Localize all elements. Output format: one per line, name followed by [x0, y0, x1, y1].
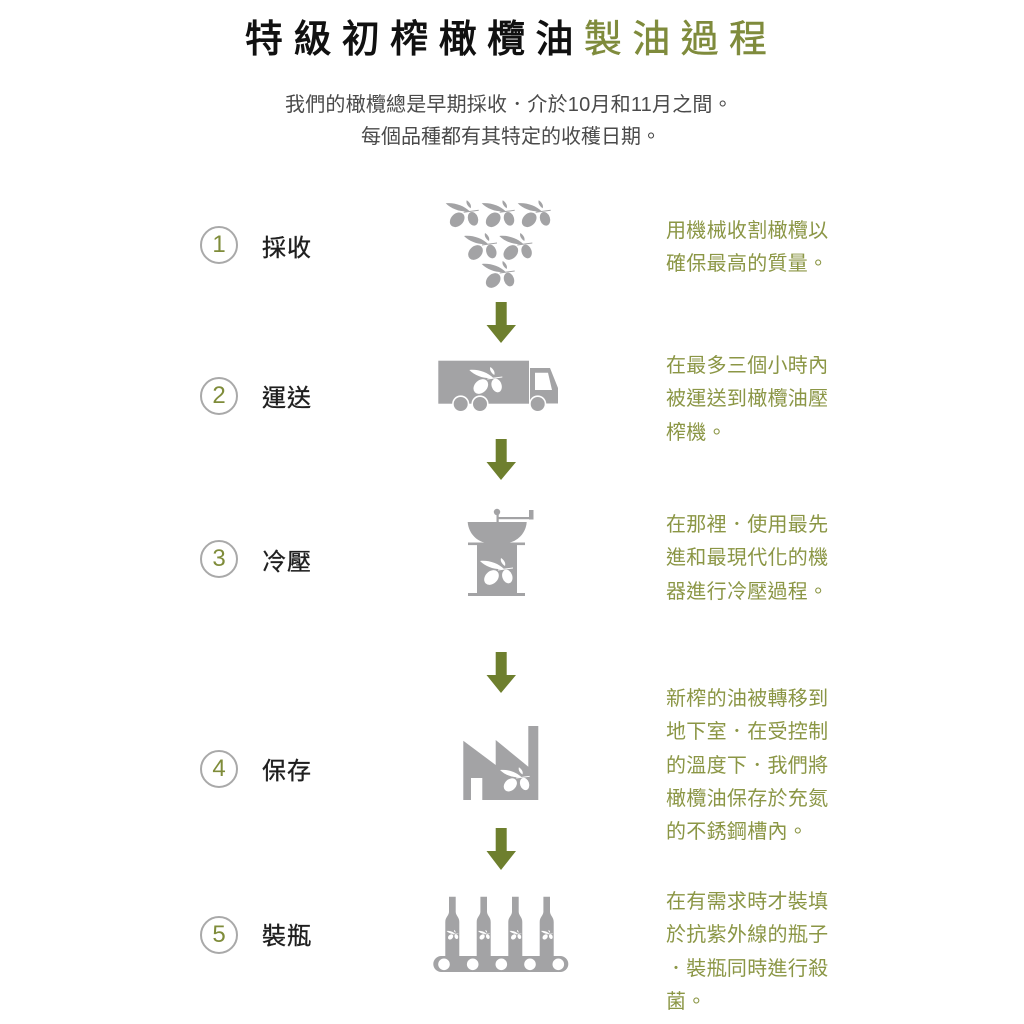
step 4 description: 橄欖油保存於充氮 [666, 788, 828, 810]
intro text line 2: 每個品種都有其特定的收穫日期。 [361, 126, 661, 148]
icon: factory [463, 726, 538, 800]
step 2 description: 榨機。 [666, 422, 727, 444]
step 4 description: 的溫度下．我們將 [666, 755, 828, 777]
step 5 description: 菌。 [666, 991, 707, 1013]
step 1 description [666, 220, 828, 275]
step 4 description: 地下室．在受控制 [666, 721, 828, 743]
step 1 label: 採收 [262, 235, 312, 262]
step 5 description: 於抗紫外線的瓶子 [666, 924, 828, 946]
step 5 description: ．裝瓶同時進行殺 [666, 958, 828, 980]
step 2 description: 被運送到橄欖油壓 [666, 388, 828, 410]
step 3 description: 器進行冷壓過程。 [666, 581, 828, 603]
step 3 description: 進和最現代化的機 [666, 547, 828, 569]
step 4 number [200, 750, 238, 788]
arrow 1 [486, 302, 516, 343]
step 2 label: 運送 [262, 385, 312, 412]
step 4 description: 的不銹鋼槽內。 [666, 821, 808, 843]
step 1 number: 1 [212, 231, 226, 258]
step 5 number [200, 916, 238, 954]
step 3 label: 冷壓 [262, 549, 312, 576]
step 2 number: 2 [212, 382, 226, 409]
step 5 number: 5 [212, 921, 226, 948]
step 1 number [200, 226, 238, 264]
step 1 description: 確保最高的質量。 [666, 253, 828, 275]
step 4 number: 4 [212, 755, 226, 782]
step 4 description: 新榨的油被轉移到 [666, 688, 828, 710]
step 2 description: 在最多三個小時內 [666, 355, 828, 377]
title: 特級初榨橄欖油製油過程 [245, 19, 777, 61]
icon: olive mill [468, 509, 534, 596]
arrow 2 [486, 439, 516, 480]
step 3 description: 在那裡．使用最先 [666, 514, 828, 536]
step 5 description: 在有需求時才裝填 [666, 891, 828, 913]
step 5 label: 裝瓶 [262, 923, 312, 950]
icon: bottles on conveyor [433, 897, 568, 972]
step 4 description [666, 688, 828, 843]
icon: olives [446, 200, 552, 291]
arrow 3 [486, 652, 516, 693]
intro text line 1: 我們的橄欖總是早期採收．介於10月和11月之間。 [285, 94, 733, 116]
icon: truck [438, 361, 558, 412]
step 3 number: 3 [212, 545, 226, 572]
arrow 4 [486, 828, 516, 870]
step 2 description [666, 355, 828, 444]
step 4 label: 保存 [262, 758, 312, 785]
step 3 description [666, 514, 828, 603]
step 3 number [200, 540, 238, 578]
step 2 number [200, 377, 238, 415]
step 5 description [666, 891, 828, 1013]
step 1 description: 用機械收割橄欖以 [666, 220, 828, 242]
